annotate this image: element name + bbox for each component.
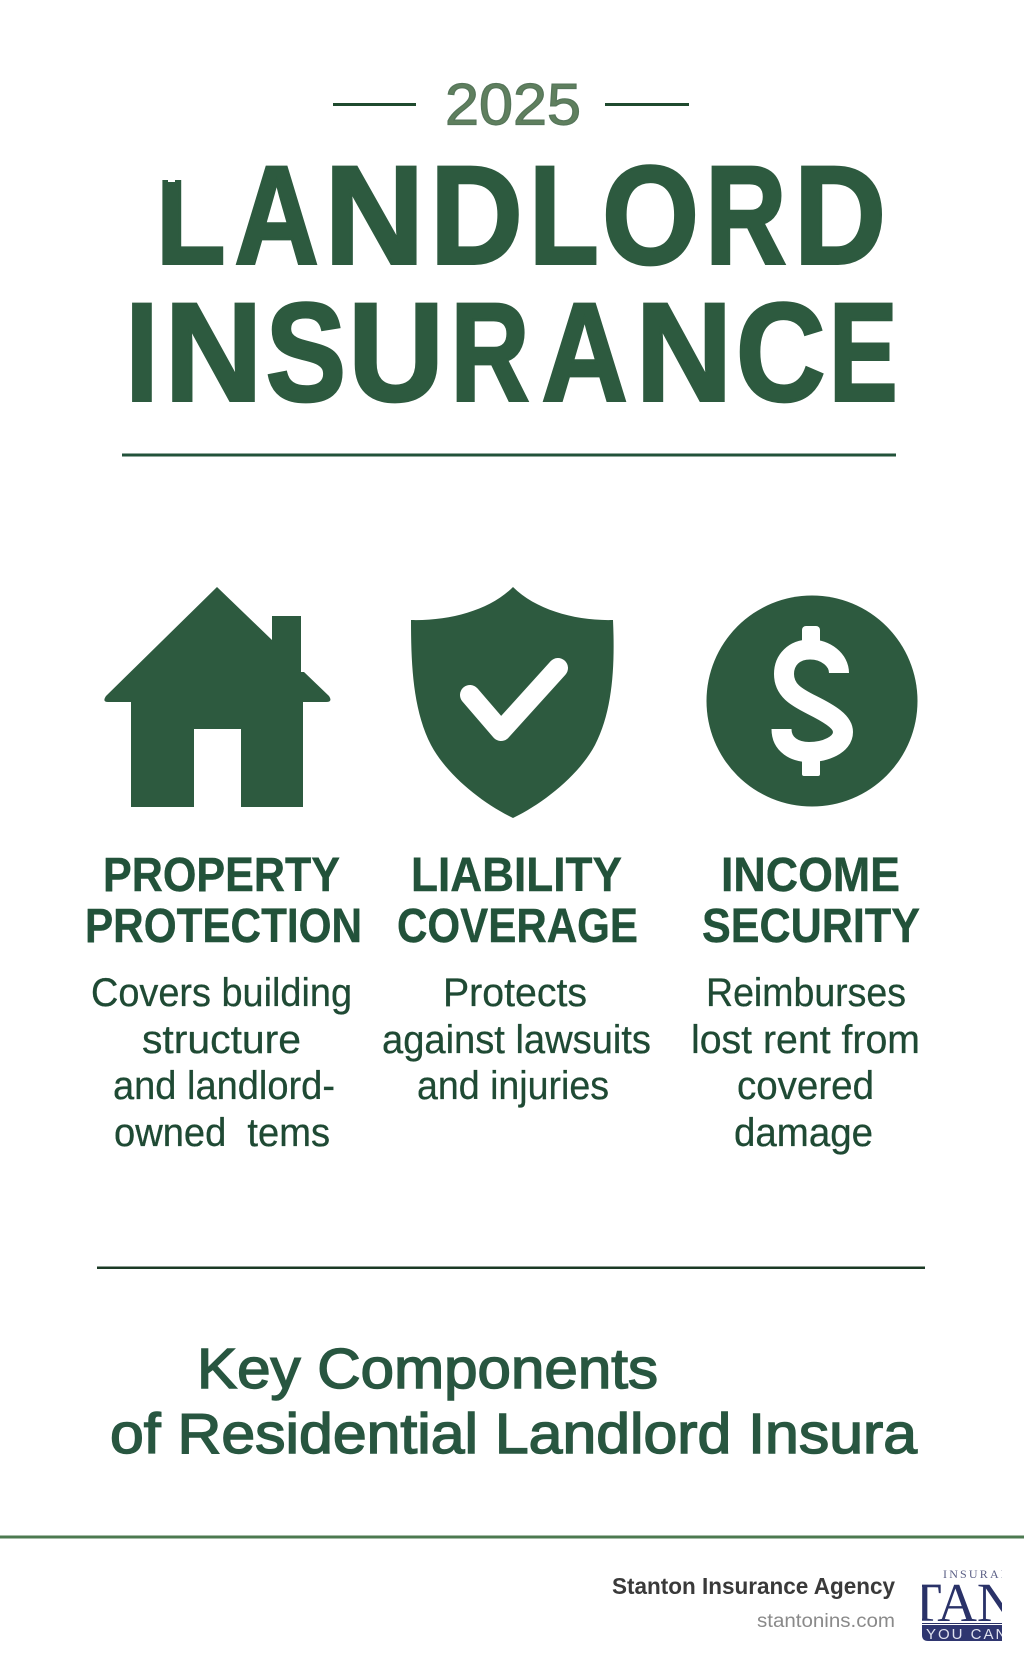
heading: property protection: PROPERTY [103, 849, 340, 902]
heading: liability coverage [397, 849, 638, 953]
title: D [430, 136, 523, 294]
heading: income security [702, 849, 920, 953]
description: liability coverage: and injuries [417, 1064, 609, 1108]
heading: property protection [85, 849, 362, 953]
description: income security: lost rent from [691, 1018, 920, 1062]
title: I [125, 274, 158, 430]
year label with side dashes [333, 72, 689, 138]
description: income security: Reimburses [706, 971, 906, 1015]
title: A [542, 274, 628, 430]
title: C [736, 274, 825, 430]
footer logo: YOU CAN [926, 1626, 1008, 1643]
title: N [165, 274, 262, 430]
heading: property protection: PROTECTION [85, 900, 362, 953]
title: R [450, 274, 529, 430]
title [125, 136, 897, 430]
title: S [266, 274, 346, 430]
title: E [829, 274, 898, 430]
footer agency name and website: Stanton Insurance Agency [612, 1573, 895, 1599]
subtitle: of Residential Landlord Insura [110, 1402, 917, 1466]
heading: income security: SECURITY [702, 900, 920, 953]
description: property protection: Covers building [91, 971, 352, 1015]
title: N [636, 274, 732, 430]
footer logo: TAN [908, 1572, 1017, 1633]
icon: dollar coin [706, 596, 918, 806]
icon: house [104, 587, 330, 807]
description: liability coverage [382, 971, 651, 1108]
footer logo [922, 1570, 1002, 1641]
panel: income security [691, 849, 920, 1155]
year label with side dashes: 2025 [445, 72, 581, 138]
description: liability coverage: Protects [443, 971, 587, 1015]
title: O [602, 136, 699, 294]
description: income security: covered [737, 1064, 874, 1108]
title: A [234, 136, 319, 294]
title: R [705, 136, 786, 294]
description: income security [691, 971, 920, 1155]
subtitle: Key Components [197, 1337, 658, 1401]
heading: liability coverage: COVERAGE [397, 900, 638, 953]
description: property protection: and landlord- [113, 1064, 335, 1108]
footer agency name and website [612, 1573, 895, 1632]
title: U [348, 274, 444, 430]
description: income security: damage [734, 1111, 873, 1155]
title: L [529, 136, 599, 294]
description: property protection: structure [142, 1018, 301, 1062]
panel: property protection [85, 849, 362, 1155]
icon: shield with check [411, 587, 614, 818]
heading: liability coverage: LIABILITY [411, 849, 622, 902]
footer agency name and website: stantonins.com [757, 1611, 895, 1632]
description: property protection [91, 971, 352, 1155]
title: D [794, 136, 886, 294]
description: property protection: owned tems [114, 1111, 330, 1155]
title: N [324, 136, 424, 294]
heading: income security: INCOME [721, 849, 900, 902]
title: L [156, 136, 226, 294]
description: liability coverage: against lawsuits [382, 1018, 651, 1062]
subtitle [110, 1337, 917, 1466]
panel: liability coverage [382, 849, 651, 1108]
